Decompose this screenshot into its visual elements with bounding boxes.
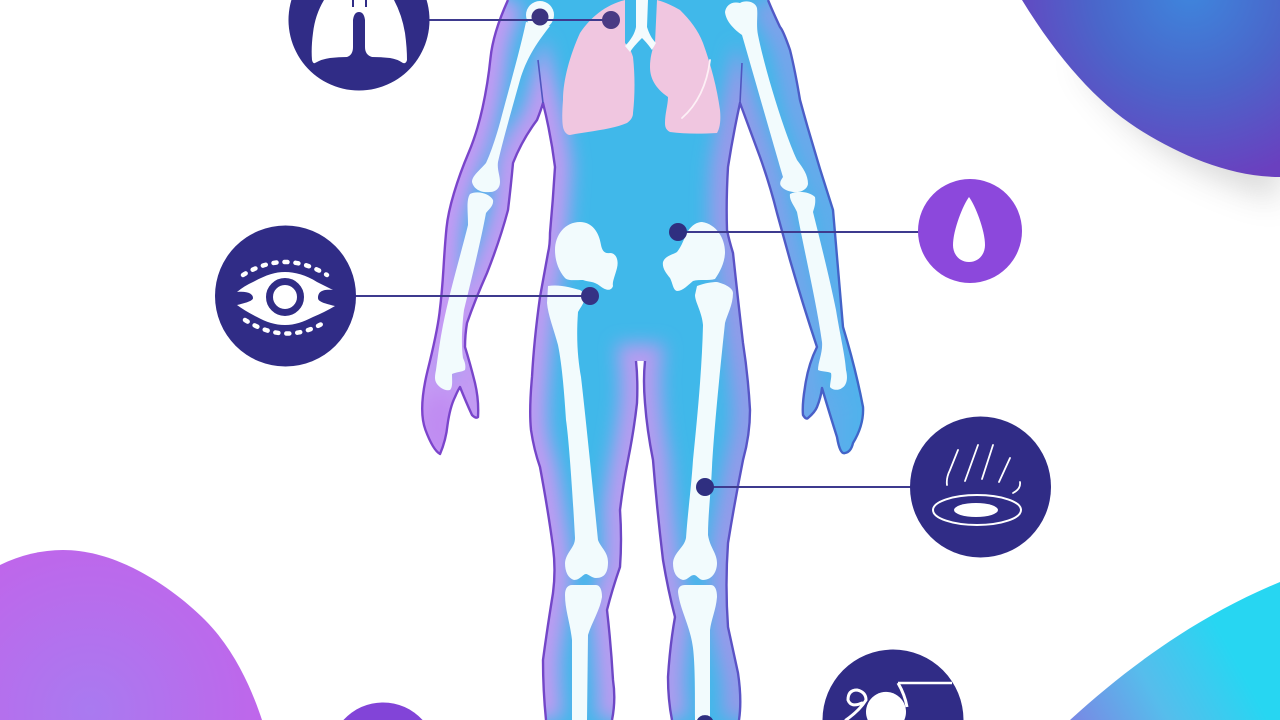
- trachea: [625, 0, 656, 52]
- background blob: bottom right: [1070, 582, 1280, 720]
- background blob: top right: [1022, 0, 1280, 200]
- right arm humerus: [725, 1, 808, 192]
- background blob: bottom left: [0, 550, 262, 720]
- connector: eye icon to hip: [354, 287, 599, 305]
- icon: bottom right: [822, 650, 964, 720]
- bones: [435, 1, 847, 720]
- right femur: [673, 282, 733, 580]
- left tibia: [565, 585, 602, 720]
- icon: eye: [215, 226, 356, 366]
- icon: lungs: [288, 0, 430, 91]
- left arm humerus: [472, 1, 554, 192]
- left arm forearm: [435, 192, 493, 390]
- body silhouette: [400, 0, 880, 720]
- right tibia: [678, 585, 717, 720]
- connector: lungs icon to shoulder and lung: [428, 8, 620, 29]
- icon: drop: [918, 179, 1022, 283]
- left femur: [547, 285, 608, 580]
- connector: burn icon to femur: [696, 478, 912, 496]
- human body figure: [400, 0, 880, 720]
- right pelvis: [663, 222, 725, 291]
- icon: burn: [910, 416, 1051, 558]
- icon: bottom left purple circle: [343, 702, 423, 720]
- connector: drop icon to pelvis: [669, 223, 920, 241]
- connector dot: lower leg: [697, 715, 713, 720]
- right arm forearm: [790, 192, 847, 390]
- left pelvis: [555, 222, 618, 290]
- lungs: [562, 0, 720, 135]
